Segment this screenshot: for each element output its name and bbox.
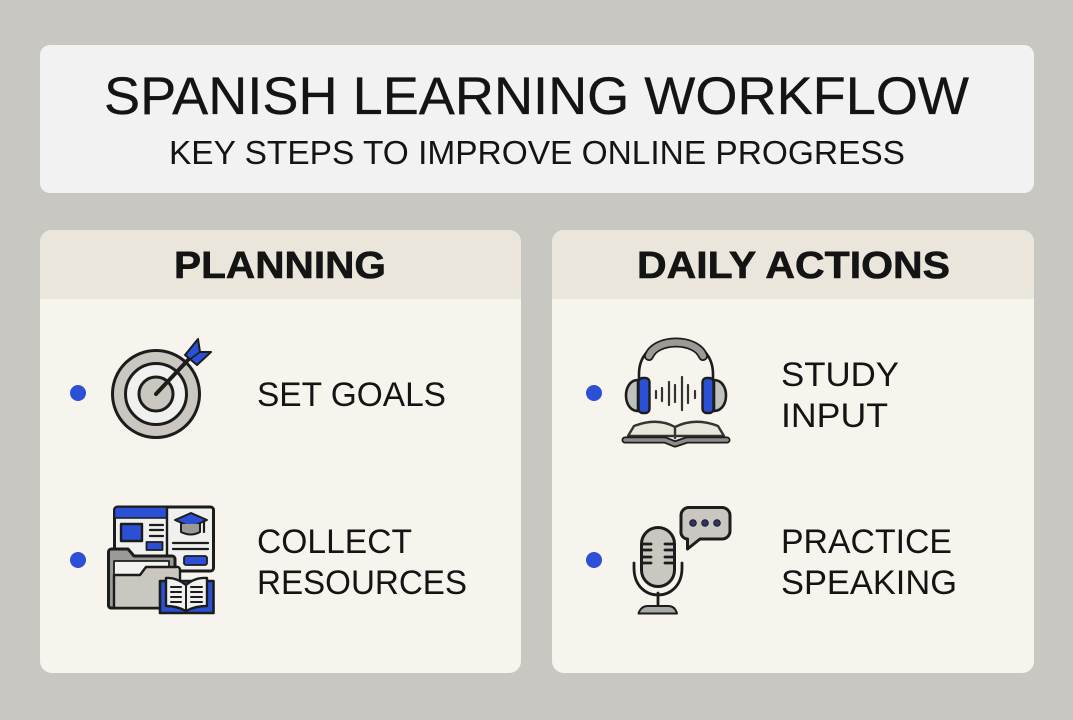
heading: daily actions: DAILY ACTIONS <box>637 245 950 287</box>
bullet: study input <box>586 385 602 401</box>
bullet: practice speaking <box>586 552 602 568</box>
label: practice speaking: PRACTICE <box>781 523 952 561</box>
icon: browser, folder and book <box>108 507 214 613</box>
label: study input: INPUT <box>781 397 888 435</box>
label: collect resources: COLLECT <box>257 523 412 561</box>
label: study input <box>781 356 899 435</box>
label: collect resources <box>257 523 467 602</box>
bullet: collect resources <box>70 552 86 568</box>
title: SPANISH LEARNING WORKFLOW <box>104 67 969 126</box>
bullet: set goals <box>70 385 86 401</box>
subtitle: KEY STEPS TO IMPROVE ONLINE PROGRESS <box>169 135 905 172</box>
icon: target with arrow <box>112 339 211 438</box>
panel: planning <box>40 230 521 673</box>
heading: planning: PLANNING <box>174 245 386 287</box>
label: study input: STUDY <box>781 356 899 394</box>
title banner <box>40 45 1034 193</box>
label: set goals: SET GOALS <box>257 376 446 414</box>
icon: microphone and speech bubble <box>634 508 730 614</box>
panel: daily actions <box>552 230 1034 673</box>
label: collect resources: RESOURCES <box>257 564 467 602</box>
icon: headphones and open book <box>625 340 727 444</box>
label: practice speaking <box>781 523 957 602</box>
label: practice speaking: SPEAKING <box>781 564 957 602</box>
